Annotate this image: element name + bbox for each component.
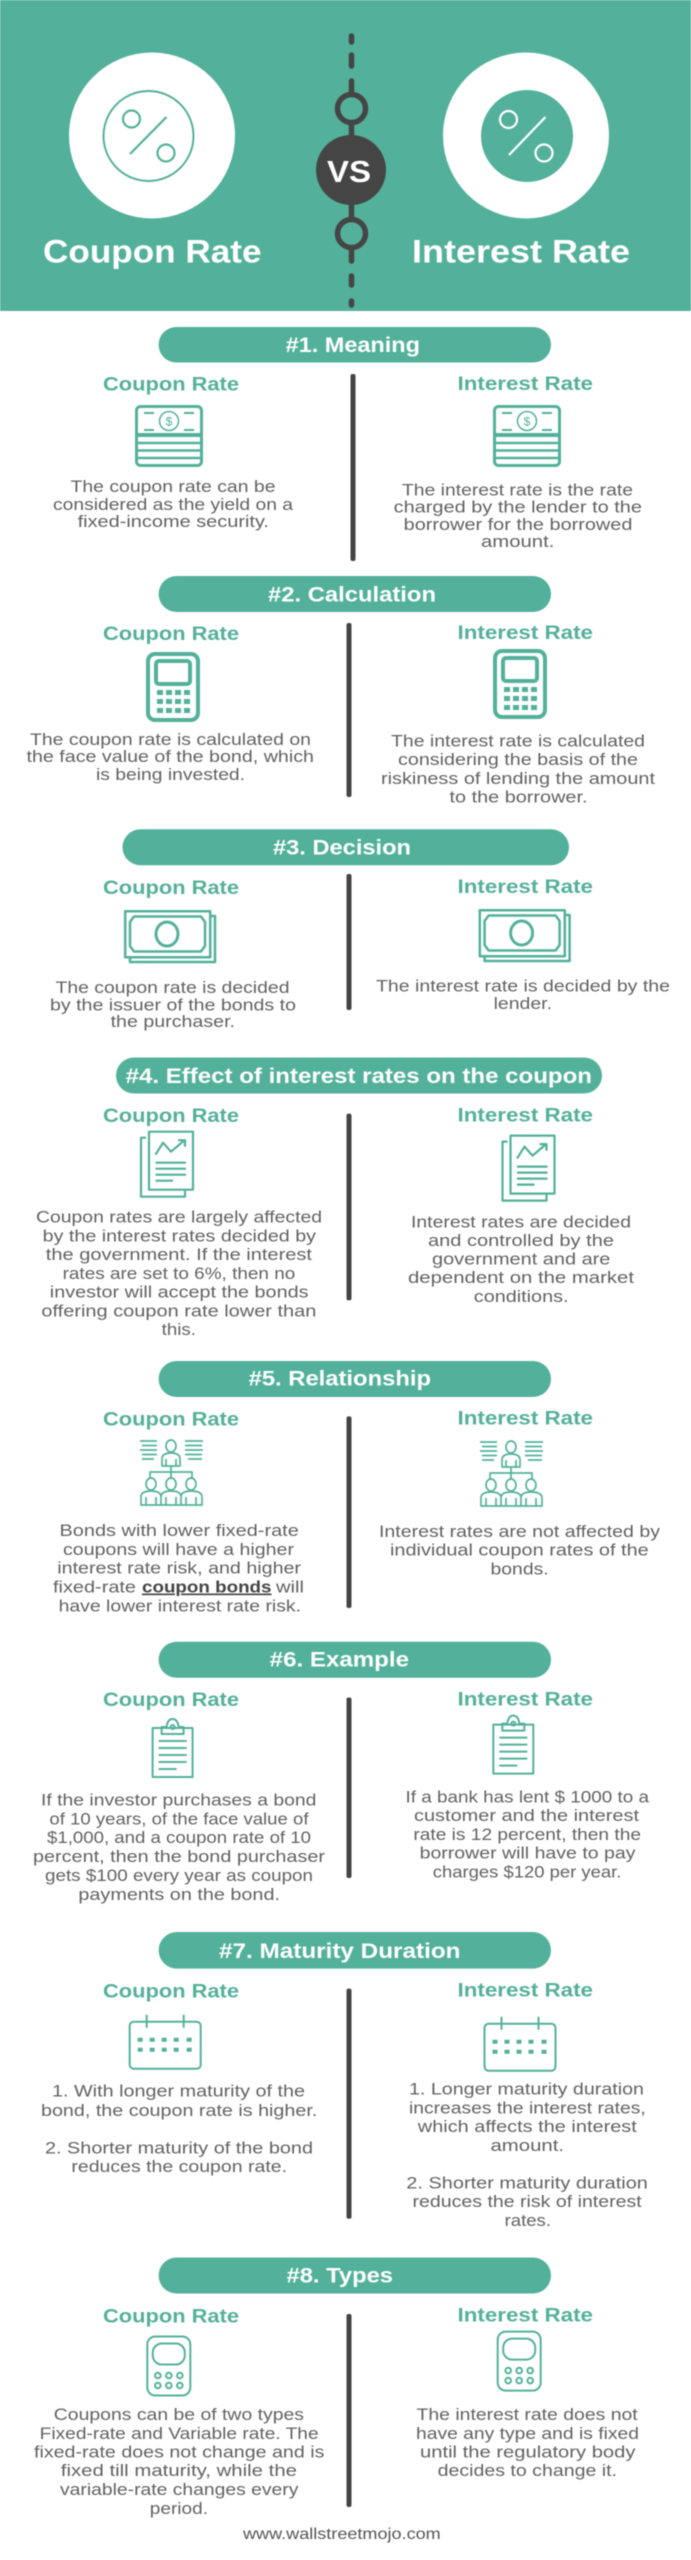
- section title pill: [122, 829, 569, 865]
- interest rate text: riskiness of lending the amount: [381, 770, 655, 788]
- icon: calculator: [148, 654, 198, 720]
- section title pill: #1. Meaning: [286, 333, 420, 357]
- coupon rate text: Coupon rates are largely affected: [36, 1208, 322, 1226]
- coupon rate text: [36, 1208, 322, 1339]
- coupon rate text: the government. If the interest: [46, 1246, 312, 1264]
- heading: interest rate: Interest Rate: [412, 234, 630, 270]
- section title pill: #5. Relationship: [249, 1367, 431, 1391]
- coupon rate text: The coupon rate is calculated on: [30, 731, 311, 749]
- coupon rate text: payments on the bond.: [78, 1886, 280, 1904]
- interest rate text: [406, 1788, 650, 1882]
- icon: calendar: [484, 2017, 556, 2071]
- coupon rate text: Fixed-rate and Variable rate. The: [40, 2425, 319, 2443]
- coupon rate text: by the interest rates decided by: [43, 1227, 317, 1245]
- section title pill: [159, 1932, 551, 1969]
- section 3: decision: [50, 829, 670, 1031]
- coupon rate label: Coupon Rate: [103, 623, 239, 645]
- interest rate text: to the borrower.: [450, 789, 588, 807]
- interest rate text: and controlled by the: [428, 1232, 614, 1250]
- coupon rate text: period.: [150, 2500, 208, 2518]
- section title pill: #2. Calculation: [268, 583, 436, 607]
- interest rate text: [381, 733, 655, 807]
- interest rate text: Interest rates are decided: [411, 1214, 631, 1232]
- center divider: [346, 623, 352, 797]
- interest rate label: Interest Rate: [458, 1104, 593, 1126]
- section title pill: [159, 576, 551, 612]
- interest rate text: bonds.: [490, 1560, 549, 1578]
- coupon rate label: Coupon Rate: [103, 2305, 239, 2327]
- interest rate text: charges $120 per year.: [433, 1864, 621, 1882]
- coupon rate text: rates are set to 6%, then no: [63, 1265, 295, 1283]
- section title pill: #7. Maturity Duration: [219, 1939, 460, 1963]
- coupon rate text: The coupon rate can be: [70, 478, 276, 496]
- coupon rate text: [41, 2083, 317, 2176]
- coupon rate text: [26, 731, 314, 784]
- section title pill: #8. Types: [286, 2263, 393, 2287]
- heading: coupon rate: Coupon Rate: [43, 234, 262, 270]
- interest rate text: conditions.: [474, 1288, 568, 1306]
- interest rate text: rates.: [505, 2212, 551, 2230]
- icon: cash stack: [125, 911, 215, 962]
- interest rate text: increases the interest rates,: [409, 2100, 646, 2118]
- coupon rate label: Coupon Rate: [103, 1408, 239, 1430]
- coupon rate text: offering coupon rate lower than: [41, 1302, 316, 1320]
- interest rate text: The interest rate is the rate: [402, 482, 633, 500]
- icon: org chart: [140, 1440, 203, 1505]
- coupon rate text: fixed-rate does not change and is: [34, 2444, 324, 2462]
- coupon rate text: percent, then the bond purchaser: [33, 1848, 326, 1866]
- icon: banknote: $: [166, 414, 173, 428]
- interest rate label: Interest Rate: [458, 1688, 593, 1710]
- icon: clipboard: [153, 1719, 193, 1777]
- icon: cash stack: [480, 910, 570, 961]
- interest rate label: Interest Rate: [458, 373, 593, 395]
- interest rate label: Interest Rate: [458, 1408, 593, 1430]
- coupon rate text: coupon bonds: [142, 1578, 272, 1596]
- coupon rate text: [50, 979, 296, 1031]
- coupon rate text: will: [275, 1578, 304, 1596]
- icon: clipboard: [493, 1716, 533, 1774]
- section title pill: #6. Example: [270, 1647, 409, 1671]
- interest rate text: amount.: [490, 2137, 564, 2155]
- header banner: [0, 0, 691, 311]
- section title pill: #4. Effect of interest rates on the coupon: [126, 1064, 592, 1088]
- center divider: [346, 1698, 352, 1878]
- icon: interest rate percent badge: [443, 52, 609, 218]
- interest rate text: [394, 482, 642, 551]
- coupon rate text: [34, 2406, 324, 2518]
- interest rate text: dependent on the market: [408, 1269, 635, 1287]
- icon: banknote: [494, 406, 560, 466]
- coupon rate text: interest rate risk, and higher: [57, 1560, 302, 1578]
- section title pill: [159, 1361, 551, 1397]
- coupon rate text: this.: [162, 1321, 196, 1339]
- interest rate text: have any type and is fixed: [416, 2425, 639, 2443]
- section 7: maturity duration: [41, 1932, 648, 2230]
- center divider: [346, 1114, 352, 1300]
- coupon rate text: 2. Shorter maturity of the bond: [45, 2140, 313, 2158]
- interest rate text: reduces the risk of interest: [412, 2193, 642, 2211]
- coupon rate text: 1. With longer maturity of the: [52, 2083, 305, 2101]
- icon: calendar: [130, 2015, 201, 2069]
- coupon rate text: is being invested.: [96, 766, 245, 784]
- interest rate text: customer and the interest: [414, 1807, 639, 1825]
- coupon rate text: [53, 1522, 304, 1615]
- interest rate label: Interest Rate: [458, 876, 593, 898]
- center divider: [346, 2314, 352, 2507]
- interest rate text: 1. Longer maturity duration: [409, 2081, 644, 2099]
- section title pill: [116, 1058, 602, 1094]
- icon: org chart: [480, 1441, 543, 1506]
- interest rate text: amount.: [481, 533, 554, 551]
- coupon rate text: Bonds with lower fixed-rate: [60, 1522, 299, 1540]
- interest rate text: 2. Shorter maturity duration: [406, 2175, 648, 2193]
- source website: www.wallstreetmojo.com: [242, 2526, 441, 2543]
- section 8: types: [34, 2258, 639, 2518]
- coupon rate label: Coupon Rate: [103, 1689, 239, 1711]
- icon: calculator: [495, 651, 545, 717]
- interest rate text: until the regulatory body: [420, 2444, 636, 2462]
- interest rate text: [376, 977, 670, 1013]
- section 2: calculation: [26, 576, 655, 807]
- icon: keypad device: [147, 2336, 190, 2396]
- section 4: effect of interest rates: [36, 1058, 635, 1339]
- coupon rate text: fixed-income security.: [78, 513, 269, 531]
- icon: coupon rate percent badge: [69, 52, 235, 218]
- coupon rate text: If the investor purchases a bond: [41, 1792, 316, 1810]
- section title pill: [159, 327, 551, 362]
- coupon rate text: The coupon rate is decided: [56, 979, 290, 997]
- section title pill: #3. Decision: [273, 835, 411, 859]
- center divider: [350, 374, 356, 561]
- center divider: [346, 1989, 352, 2219]
- interest rate text: [406, 2081, 648, 2230]
- interest rate text: lender.: [494, 995, 552, 1013]
- coupon rate label: Coupon Rate: [103, 374, 239, 396]
- icon: report document: [141, 1132, 193, 1197]
- coupon rate text: bond, the coupon rate is higher.: [41, 2102, 317, 2120]
- interest rate text: [408, 1214, 635, 1306]
- coupon rate text: investor will accept the bonds: [50, 1284, 309, 1302]
- section 1: meaning: [53, 327, 642, 561]
- interest rate text: [416, 2406, 639, 2480]
- interest rate text: decides to change it.: [438, 2462, 617, 2480]
- interest rate text: which affects the interest: [417, 2118, 637, 2136]
- interest rate text: The interest rate is decided by the: [376, 977, 670, 995]
- icon: keypad device: [498, 2332, 541, 2391]
- coupon rate text: of 10 years, of the face value of: [49, 1811, 309, 1829]
- coupon rate text: [53, 478, 294, 531]
- vs divider with chain: [316, 36, 386, 305]
- interest rate text: borrower for the borrowed: [404, 516, 632, 534]
- interest rate text: borrower will have to pay: [420, 1845, 636, 1863]
- coupon rate text: $1,000, and a coupon rate of 10: [47, 1829, 311, 1847]
- interest rate text: If a bank has lent $ 1000 to a: [406, 1788, 650, 1806]
- icon: report document: [502, 1136, 554, 1201]
- coupon rate text: variable-rate changes every: [60, 2481, 299, 2499]
- center divider: [346, 1416, 352, 1608]
- coupon rate text: considered as the yield on a: [53, 496, 294, 514]
- interest rate label: Interest Rate: [458, 1980, 593, 2002]
- section title pill: [159, 1642, 551, 1678]
- coupon rate text: gets $100 every year as coupon: [45, 1867, 313, 1885]
- coupon rate label: Coupon Rate: [103, 1981, 239, 2003]
- icon: banknote: [136, 406, 202, 466]
- interest rate text: individual coupon rates of the: [390, 1542, 649, 1560]
- interest rate text: The interest rate does not: [416, 2406, 638, 2424]
- coupon rate text: the purchaser.: [111, 1013, 235, 1031]
- section title pill: [159, 2258, 551, 2294]
- center divider: [346, 874, 352, 1010]
- coupon rate text: the face value of the bond, which: [26, 748, 314, 766]
- section 5: relationship: [53, 1361, 661, 1615]
- interest rate text: The interest rate is calculated: [391, 733, 645, 751]
- coupon rate text: [33, 1792, 326, 1904]
- interest rate label: Interest Rate: [458, 622, 593, 644]
- interest rate text: considering the basis of the: [398, 751, 638, 769]
- coupon rate text: Coupons can be of two types: [54, 2406, 304, 2424]
- coupon rate text: reduces the coupon rate.: [71, 2158, 287, 2176]
- interest rate text: [379, 1523, 661, 1578]
- coupon rate text: by the issuer of the bonds to: [50, 996, 296, 1014]
- interest rate text: Interest rates are not affected by: [379, 1523, 661, 1541]
- coupon rate text: fixed till maturity, while the: [61, 2462, 297, 2480]
- interest rate text: government and are: [432, 1251, 610, 1269]
- coupon rate text: coupons will have a higher: [63, 1541, 295, 1559]
- interest rate label: Interest Rate: [458, 2305, 593, 2327]
- vs divider with chain: VS: [327, 154, 371, 189]
- coupon rate text: fixed-rate: [53, 1578, 136, 1596]
- icon: banknote: $: [524, 414, 531, 428]
- interest rate text: rate is 12 percent, then the: [413, 1826, 641, 1844]
- coupon rate label: Coupon Rate: [103, 877, 239, 899]
- section 6: example: [33, 1642, 650, 1904]
- coupon rate text: have lower interest rate risk.: [59, 1597, 301, 1615]
- coupon rate label: Coupon Rate: [103, 1105, 239, 1127]
- interest rate text: charged by the lender to the: [394, 499, 642, 517]
